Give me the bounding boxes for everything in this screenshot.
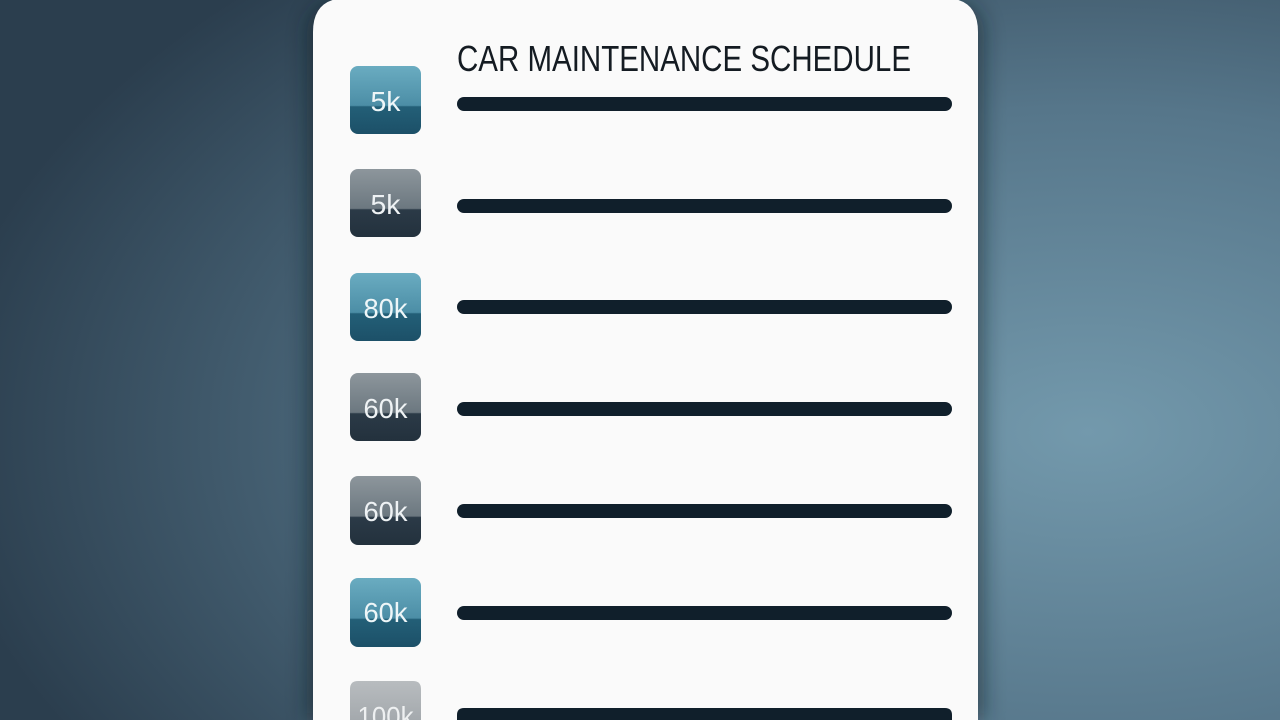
row 1: 5k xyxy=(370,86,402,117)
title: CAR MAINTENANCE SCHEDULE xyxy=(457,38,911,79)
row 6: 60k xyxy=(364,597,408,628)
row 6 xyxy=(350,578,952,647)
row 5: 60k xyxy=(364,496,408,527)
row 7 xyxy=(350,681,952,720)
row 4 xyxy=(350,373,952,441)
row 3: 80k xyxy=(364,293,408,324)
row 1 xyxy=(350,66,952,134)
row 4: 60k xyxy=(364,393,408,424)
row 2: 5k xyxy=(370,189,402,220)
row 3 xyxy=(350,273,952,341)
row 5 xyxy=(350,476,952,545)
panel: schedule card xyxy=(313,0,978,720)
row 2 xyxy=(350,169,952,237)
